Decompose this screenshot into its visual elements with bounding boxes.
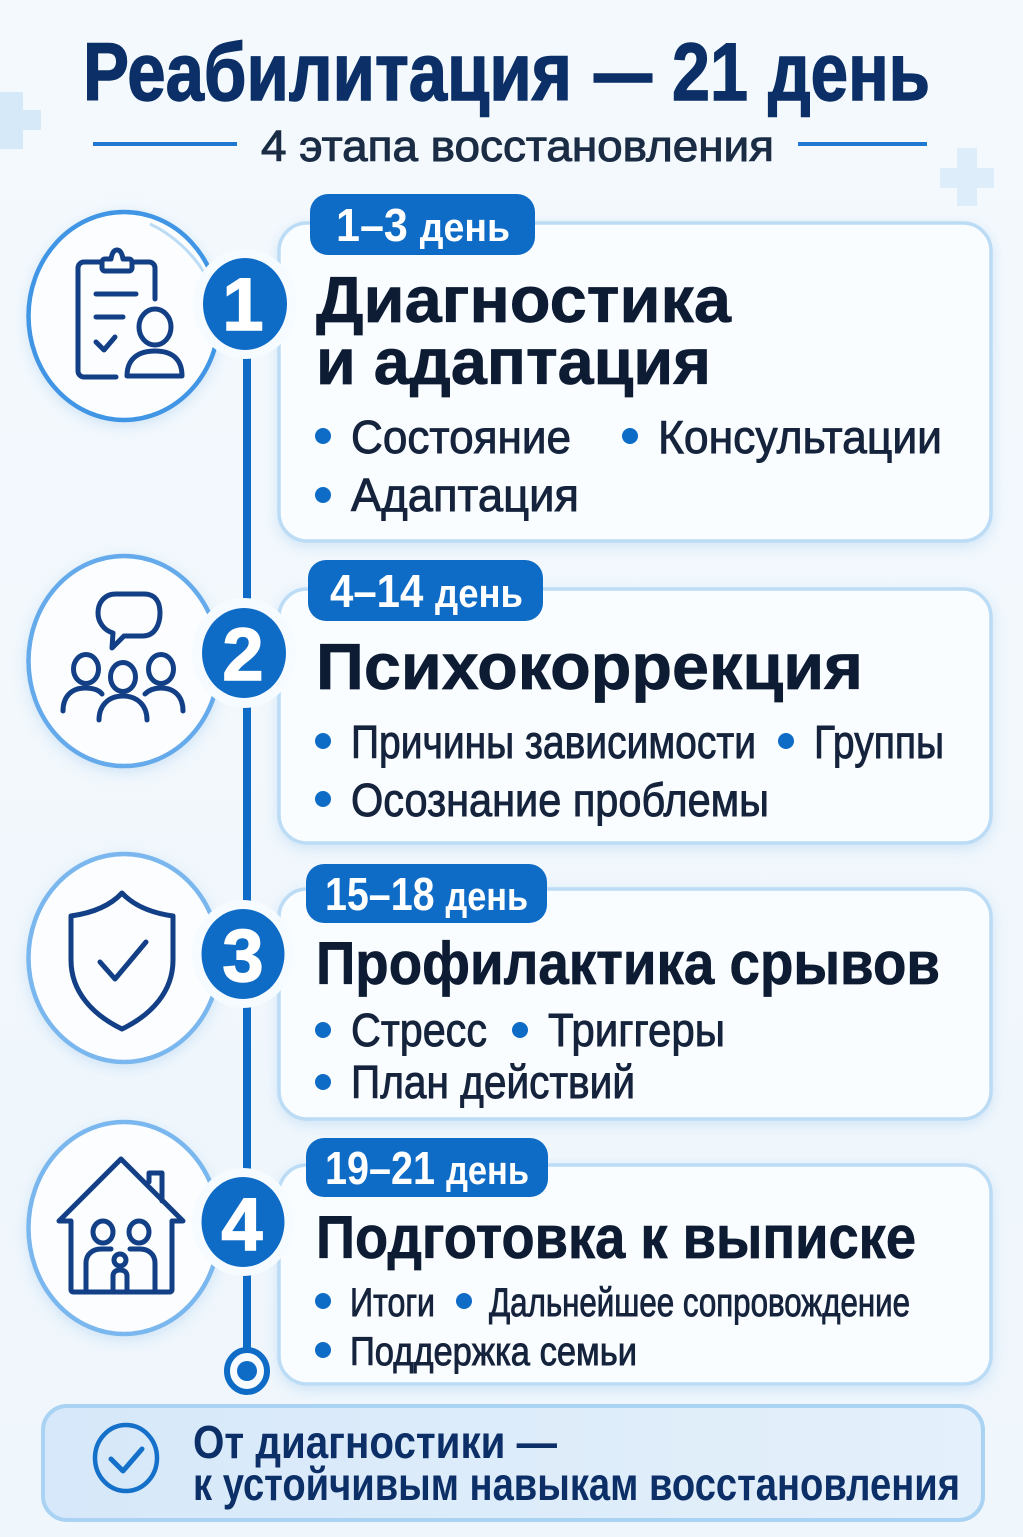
stage 1 bullets: Консультации <box>658 411 942 463</box>
icon: shield check <box>71 893 173 1029</box>
stage 1 bullets <box>315 411 942 521</box>
stage 3 bullets: Стресс <box>351 1004 487 1056</box>
number badge 1: 1 <box>222 263 264 346</box>
stage 1 bullets: Адаптация <box>351 469 579 521</box>
icon: check circle <box>95 1425 157 1491</box>
timeline line <box>243 340 251 1355</box>
number badge 2 <box>192 598 296 708</box>
callout text <box>193 1416 960 1510</box>
stage 4 bullets: Поддержка семьи <box>350 1330 637 1374</box>
number badge 4 <box>192 1168 294 1276</box>
number badge 4: 4 <box>221 1183 263 1266</box>
pill: 4-14 день: 4–14 день <box>330 565 523 617</box>
pill: 1-3 день: 1–3 день <box>336 199 510 251</box>
icon circle: group with speech bubble <box>28 556 220 766</box>
icon circle: shield <box>28 854 220 1062</box>
pill: 19-21 день: 19–21 день <box>325 1142 529 1194</box>
icon: house family <box>59 1159 183 1292</box>
title: Реабилитация <box>83 27 572 118</box>
stage 2 bullets: Осознание проблемы <box>351 774 769 826</box>
stage 1 bullets: Состояние <box>351 411 571 463</box>
stage 1 heading: Диагностика <box>316 263 732 336</box>
decorative plus right <box>940 148 994 206</box>
icon circle: house with family <box>28 1122 220 1334</box>
stage 3 bullets <box>315 1004 725 1108</box>
subtitle: 4 этапа восстановления <box>261 122 774 171</box>
title: 21 <box>672 27 748 118</box>
title: день <box>768 27 930 118</box>
number badge 3 <box>192 900 294 1008</box>
stage 4 heading: Подготовка к выписке <box>316 1204 916 1271</box>
number badge 2: 2 <box>222 613 264 696</box>
panel: stage 2 <box>279 589 991 843</box>
stage 2 bullets: Причины зависимости <box>351 716 756 768</box>
stage 2 bullets: Группы <box>814 716 944 768</box>
stage 2 bullets <box>315 716 944 826</box>
stage 3 heading: Профилактика срывов <box>316 930 940 997</box>
pill: 1-3 день <box>310 194 535 255</box>
stage 4 bullets: Дальнейшее сопровождение <box>489 1281 910 1325</box>
stage 2 heading: Психокоррекция <box>316 630 863 703</box>
panel: stage 3 <box>279 889 991 1119</box>
panel: stage 1 <box>279 223 991 541</box>
panel: stage 4 <box>279 1165 991 1384</box>
subtitle <box>93 122 927 171</box>
icon: group chat <box>63 594 183 720</box>
icon: clipboard <box>78 250 182 377</box>
timeline end marker <box>227 1350 267 1392</box>
number badge 3: 3 <box>222 914 264 997</box>
stage 3 bullets: Триггеры <box>548 1004 725 1056</box>
pill: 15-18 день: 15–18 день <box>325 868 528 920</box>
stage 3 bullets: План действий <box>351 1056 635 1108</box>
number badge 1 <box>193 249 297 359</box>
title: — <box>594 27 652 118</box>
stage 4 bullets: Итоги <box>350 1281 435 1325</box>
icon circle: clipboard and person <box>28 212 220 420</box>
stage 4 bullets <box>315 1281 910 1374</box>
title <box>83 27 930 118</box>
decorative plus left <box>0 92 41 149</box>
panel: stage 1: и адаптация <box>316 325 711 398</box>
callout text: От диагностики — <box>193 1416 557 1468</box>
callout banner <box>43 1406 983 1520</box>
